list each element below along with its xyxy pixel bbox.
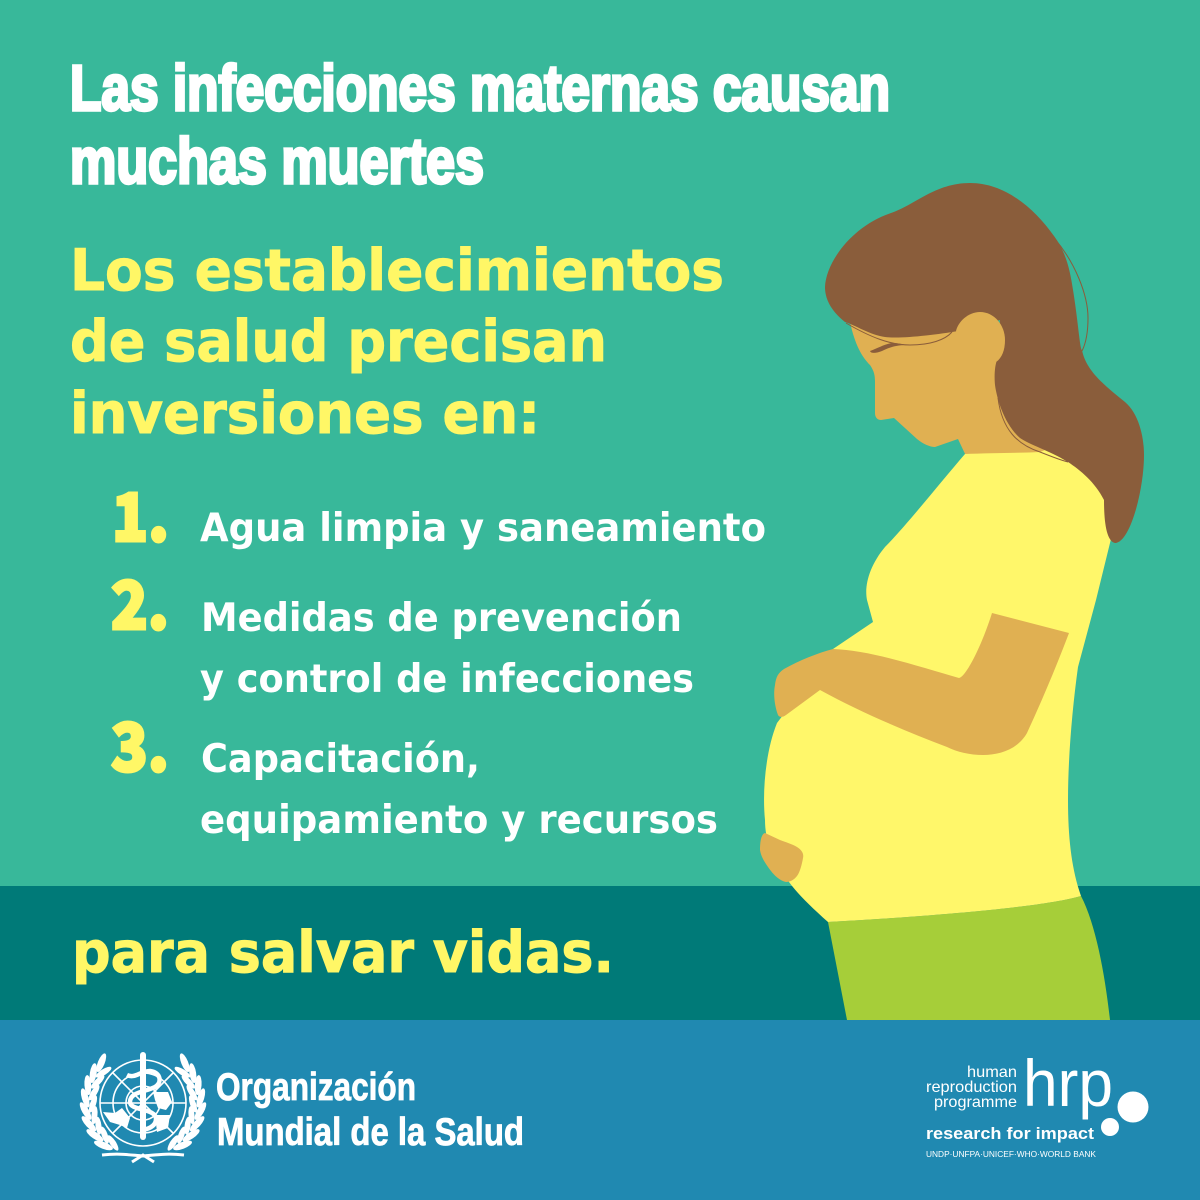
- shirt: [764, 440, 1125, 922]
- hair strands: [846, 238, 1088, 462]
- arm and upper hand: [774, 613, 1069, 755]
- title: [70, 52, 890, 197]
- item 2: [111, 553, 694, 702]
- logo text: organization name: Mundial de la Salud: [217, 1111, 524, 1154]
- logo: hrp: human: [967, 1064, 1017, 1081]
- item 1: [112, 465, 766, 561]
- ear: [956, 312, 1005, 362]
- item 3: equipamiento y recursos: [200, 798, 718, 843]
- logo: hrp: UNDP·UNFPA·UNICEF·WHO·WORLD BANK: [926, 1149, 1096, 1159]
- illustration: pregnant woman: [760, 183, 1144, 1020]
- item 3: Capacitación,: [201, 737, 480, 782]
- globe: [100, 1060, 186, 1146]
- neck and face: [850, 320, 1060, 456]
- title: Las infecciones maternas causan: [70, 52, 890, 124]
- logo: hrp: reproduction: [926, 1079, 1017, 1096]
- item 1: 1.: [112, 465, 169, 561]
- continents: [103, 1092, 172, 1132]
- eyebrow: [870, 343, 906, 353]
- logo: hrp: research for impact: [926, 1124, 1094, 1143]
- band: dark teal: [0, 886, 1200, 1020]
- ribbon: [102, 1154, 184, 1162]
- numbered list: [111, 465, 766, 843]
- logo: hrp: [926, 1046, 1148, 1159]
- subheading: Los establecimientos: [70, 238, 724, 304]
- item 2: 2.: [111, 553, 169, 649]
- hair: [825, 183, 1144, 543]
- closing statement: para salvar vidas.: [72, 920, 614, 986]
- item 1: Agua limpia y saneamiento: [200, 506, 766, 551]
- logo: hrp: programme: [934, 1094, 1017, 1111]
- lower hand: [760, 833, 803, 882]
- item 2: Medidas de prevención: [201, 596, 682, 641]
- title: muchas muertes: [70, 125, 484, 197]
- serpent: [127, 1071, 160, 1130]
- item 3: 3.: [111, 695, 169, 791]
- skirt: [828, 896, 1110, 1020]
- staff: [140, 1052, 146, 1140]
- item 2: y control de infecciones: [200, 657, 694, 702]
- item 3: [111, 695, 718, 843]
- logo: hrp: hrp: [1023, 1046, 1113, 1120]
- subheading: [70, 238, 724, 447]
- laurel wreath: [78, 1052, 208, 1152]
- footer band: blue: [0, 1020, 1200, 1200]
- logo: World Health Organization emblem: [78, 1052, 208, 1162]
- logo text: organization name: [216, 1066, 524, 1154]
- subheading: de salud precisan: [70, 309, 607, 375]
- subheading: inversiones en:: [70, 381, 540, 447]
- background: teal panel: [0, 0, 1200, 886]
- logo text: organization name: Organización: [216, 1066, 416, 1109]
